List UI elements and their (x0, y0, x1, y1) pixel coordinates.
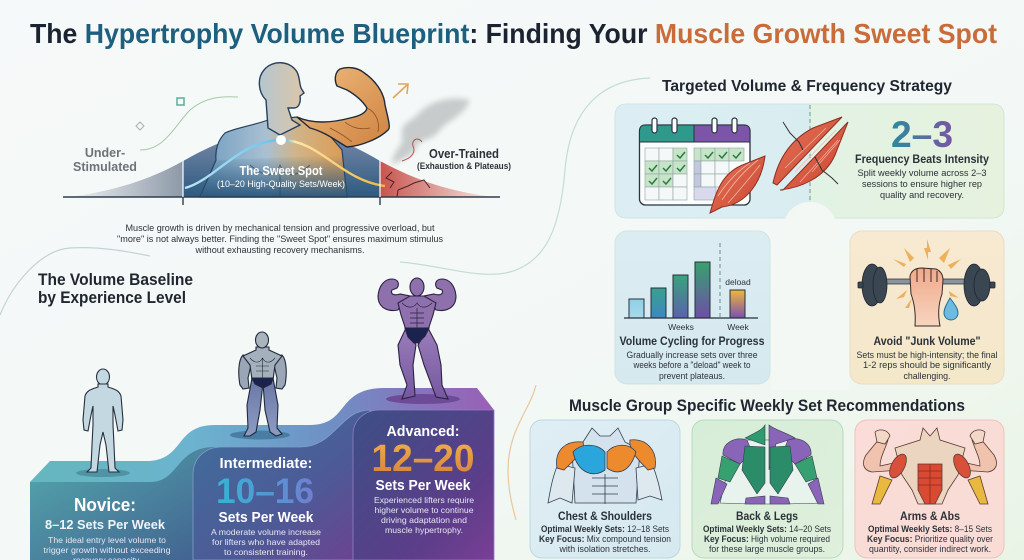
card description: Sets must be high-intensity; the final (856, 350, 998, 360)
advanced description: Experienced lifters require (374, 495, 474, 505)
advanced description: higher volume to continue (374, 505, 474, 515)
card details: Optimal Weekly Sets: 12–18 Sets (541, 524, 669, 534)
label: over-trained: Over-Trained (429, 147, 499, 161)
card description: 1-2 reps should be significantly (863, 360, 992, 370)
label: over-trained (417, 147, 511, 171)
advanced description: driving adaptation and (381, 515, 467, 525)
intro text (117, 223, 443, 256)
intro text: "more" is not always better. Finding the "Sweet Spot" ensures maximum stimulus (117, 234, 443, 245)
sweet spot marker (276, 135, 286, 145)
card details (703, 524, 831, 554)
card description (858, 168, 986, 200)
advanced description (374, 495, 474, 535)
icon: calendar (640, 118, 750, 205)
card details: Key Focus: Mix compound tension (539, 534, 671, 544)
card description: Split weekly volume across 2–3 (858, 168, 986, 178)
panel: sweet spot curve (63, 63, 511, 205)
card details: Key Focus: High volume required (704, 534, 830, 544)
advanced number: 12–20 (372, 438, 474, 480)
card details: for these large muscle groups. (709, 544, 825, 554)
card description: Gradually increase sets over three (626, 350, 758, 360)
neck and head (259, 63, 304, 135)
torso shading (200, 155, 347, 197)
center blob (771, 202, 849, 390)
novice sets: 8–12 Sets Per Week (45, 517, 166, 532)
decorative sparkle path (136, 97, 238, 150)
card details: quantity, consider indirect work. (869, 544, 991, 554)
chart labels (668, 277, 751, 332)
intro text: without exhausting recovery mechanisms. (195, 245, 364, 256)
big number: 2–3 (891, 114, 953, 155)
intermediate number: 10–16 (216, 472, 314, 511)
label: the sweet spot: The Sweet Spot (240, 164, 323, 178)
intermediate description: to consistent training. (224, 547, 308, 557)
figure: intermediate (230, 332, 290, 440)
chest lines (250, 165, 310, 197)
card description: sessions to ensure higher rep (862, 179, 982, 189)
figure: advanced (378, 278, 460, 404)
icon: fist and forearm (910, 268, 943, 326)
title: The Hypertrophy Volume Blueprint: Finding Your Muscle Growth Sweet Spot (30, 18, 997, 49)
heading: muscle group recommendations: Muscle Group Specific Weekly Set Recommendations (569, 397, 965, 415)
chart: sweet spot zone (183, 130, 380, 197)
panel: chest and shoulders (530, 420, 680, 558)
card description: quality and recovery. (880, 190, 964, 200)
panel: frequency beats intensity (615, 104, 1004, 218)
advanced sets: Sets Per Week (376, 477, 471, 494)
advanced description: muscle hypertrophy. (385, 525, 463, 535)
illustration: back (711, 425, 824, 504)
novice description: trigger growth without exceeding (44, 545, 171, 555)
icon: cracks (386, 172, 430, 197)
illustration: arms and abs (864, 428, 996, 504)
novice description (44, 535, 171, 560)
card title: Frequency Beats Intensity (855, 152, 989, 166)
card description: weeks before a "deload" week to (633, 360, 750, 370)
card details: Optimal Weekly Sets: 14–20 Sets (703, 524, 831, 534)
chart: under-stimulated zone (68, 161, 183, 197)
icon: flexing figure (200, 63, 389, 197)
staircase top surface (30, 388, 494, 500)
heading: volume baseline (38, 271, 193, 307)
advanced title: Advanced: (386, 423, 460, 440)
intermediate description: for lifters who have adapted (212, 537, 320, 547)
icon: energy rays (893, 239, 961, 308)
intro text: Muscle growth is driven by mechanical tension and progressive overload, but (126, 223, 435, 234)
card details (867, 524, 993, 554)
figure: novice (76, 369, 130, 477)
torso (200, 117, 347, 197)
arm muscle lines (330, 108, 379, 142)
label: under-stimulated: Stimulated (73, 160, 137, 174)
icon: overheating line (402, 139, 422, 161)
chart labels: deload (725, 277, 751, 287)
card title: Avoid "Junk Volume" (874, 334, 980, 348)
card details: Optimal Weekly Sets: 8–15 Sets (868, 524, 992, 534)
label: the sweet spot (217, 164, 345, 189)
label: under-stimulated (73, 146, 137, 174)
card description (626, 350, 758, 381)
icon: smoke (392, 98, 470, 165)
intermediate title: Intermediate: (220, 455, 312, 472)
card details: with isolation stretches. (559, 544, 650, 554)
label: over-trained: (Exhaustion & Plateaus) (417, 161, 511, 171)
energy wave (185, 140, 385, 188)
card title: Chest & Shoulders (558, 511, 652, 523)
panel: back and legs (692, 420, 843, 558)
baseline axis (63, 160, 500, 205)
label: under-stimulated: Under- (85, 146, 125, 160)
illustration: chest (548, 428, 662, 504)
novice description: The ideal entry level volume to (48, 535, 166, 545)
card title: Arms & Abs (900, 511, 960, 523)
panel: volume cycling (615, 231, 770, 384)
decorative connector curves (0, 78, 650, 520)
step: novice (30, 447, 215, 560)
icon: small muscle (710, 156, 765, 213)
intermediate description (211, 527, 321, 557)
flexed arm (297, 68, 389, 147)
novice title: Novice: (74, 495, 136, 515)
icon: large torn muscle (773, 117, 848, 190)
icon: trend arrow (393, 84, 408, 98)
intermediate description: A moderate volume increase (211, 527, 321, 537)
heading: volume baseline: by Experience Level (38, 289, 186, 307)
label: the sweet spot: (10–20 High-Quality Sets/Week) (217, 179, 345, 189)
chart labels: Week (727, 322, 750, 332)
panel: junk volume (850, 231, 1004, 384)
chart labels: Weeks (668, 322, 694, 332)
card details (539, 524, 671, 554)
icon: barbell (858, 264, 995, 306)
step: advanced (353, 410, 494, 560)
step: intermediate (193, 410, 370, 560)
card title: Volume Cycling for Progress (620, 334, 765, 348)
intermediate sets: Sets Per Week (218, 509, 314, 526)
card description (856, 350, 998, 381)
chart: over-trained zone (380, 161, 495, 197)
card description: prevent plateaus. (659, 371, 725, 381)
card title: Back & Legs (736, 511, 798, 523)
bar chart (624, 243, 758, 318)
heading: volume baseline: The Volume Baseline (38, 271, 193, 289)
card details: Key Focus: Prioritize quality over (867, 534, 993, 544)
card description: challenging. (904, 371, 950, 381)
panel: arms and abs (855, 420, 1004, 558)
icon: sweat drop (944, 298, 958, 320)
heading: targeted volume: Targeted Volume & Frequency Strategy (662, 78, 952, 95)
